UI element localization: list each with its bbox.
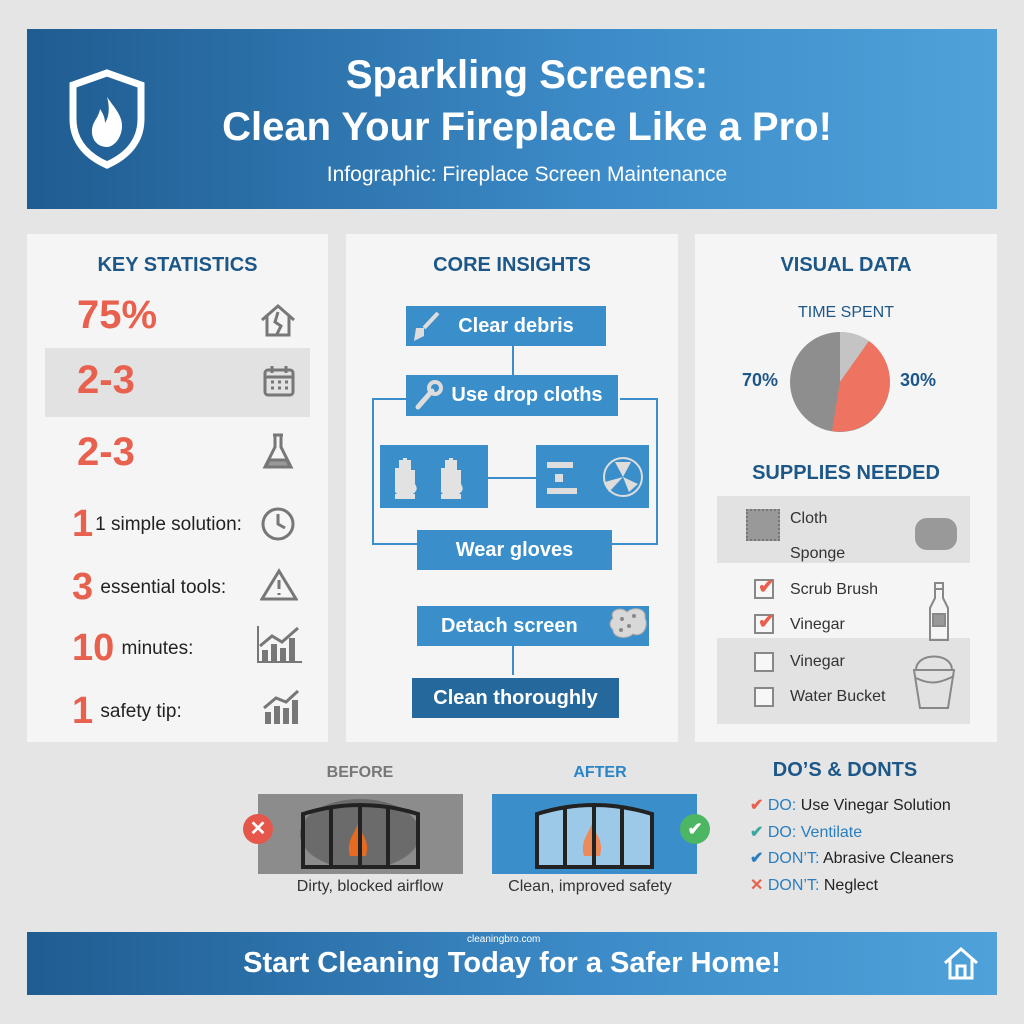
stat values <box>72 293 302 732</box>
box: clean thoroughly <box>412 678 619 718</box>
footer banner: cleaningbro.com <box>467 934 540 945</box>
box: wear gloves: Wear gloves <box>456 538 573 560</box>
before image: ✕ <box>250 818 266 840</box>
before image: BEFORE <box>327 764 393 781</box>
do's and donts: ✕ DON’T: Neglect <box>750 877 878 894</box>
panel: visual data: 70% <box>742 370 778 390</box>
box: clean thoroughly: Clean thoroughly <box>433 686 598 708</box>
after image <box>492 764 710 895</box>
title: Sparkling Screens: <box>346 53 708 97</box>
title <box>222 53 832 149</box>
supplies list: Sponge <box>790 545 845 562</box>
pie chart <box>790 332 890 432</box>
box: lock and fan icons <box>536 445 649 508</box>
box: detach screen <box>417 606 649 646</box>
do's and donts: ✔ DO: Use Vinegar Solution <box>750 797 951 814</box>
footer text: Start Cleaning Today for a Safer Home! <box>243 947 781 979</box>
do's and donts: ✔ DO: Ventilate <box>750 824 862 841</box>
stat values: 3 essential tools: <box>72 566 226 608</box>
supplies list: Scrub Brush <box>790 581 878 598</box>
box: clear debris: Clear debris <box>458 314 574 336</box>
after image: Clean, improved safety <box>508 878 672 895</box>
stat values: 75% <box>77 293 157 337</box>
before image <box>243 764 463 895</box>
icon: home <box>944 947 978 980</box>
panel: key statistics <box>27 234 328 742</box>
after image: AFTER <box>573 764 627 781</box>
supplies list: Vinegar <box>790 616 845 633</box>
icon: shield flame <box>70 69 144 169</box>
stat values: 2-3 <box>77 358 135 402</box>
header banner <box>27 29 997 209</box>
stat values: 2-3 <box>77 430 135 474</box>
supplies list: ✔ <box>758 576 775 598</box>
supplies list: Cloth <box>790 510 827 527</box>
footer banner <box>27 932 997 995</box>
heading: VISUAL DATA <box>780 254 912 276</box>
panel: core insights <box>346 234 678 742</box>
title: Clean Your Fireplace Like a Pro! <box>222 105 832 149</box>
box: detach screen: Detach screen <box>441 614 578 636</box>
box: use drop cloths: Use drop cloths <box>451 384 603 406</box>
highlight row <box>45 348 310 417</box>
before image: Dirty, blocked airflow <box>297 878 443 895</box>
stat values: 1 safety tip: <box>72 690 182 732</box>
stat values: 10 minutes: <box>72 627 193 669</box>
subheading: TIME SPENT <box>798 304 894 321</box>
do's and donts: DO’S & DONTS <box>773 759 917 781</box>
panel: visual data <box>695 234 997 742</box>
panel: visual data: 30% <box>900 370 936 390</box>
box: use drop cloths <box>406 375 618 416</box>
supplies list: ✔ <box>758 611 775 633</box>
do's and donts <box>750 759 954 894</box>
stat values: 11 simple solution: <box>72 503 242 545</box>
supplies list: Water Bucket <box>790 688 885 705</box>
box: clear debris <box>406 306 606 346</box>
subheading: supplies: SUPPLIES NEEDED <box>752 462 940 484</box>
do's and donts: ✔ DON’T: Abrasive Cleaners <box>750 850 954 867</box>
heading: CORE INSIGHTS <box>433 254 591 276</box>
supplies list <box>746 509 957 709</box>
subtitle: Infographic: Fireplace Screen Maintenance <box>327 163 727 186</box>
after image: ✔ <box>687 819 703 839</box>
heading: KEY STATISTICS <box>97 254 258 276</box>
flowchart <box>372 306 658 718</box>
box: gloves icons <box>380 445 488 508</box>
box: wear gloves <box>417 530 612 570</box>
icons <box>261 304 295 336</box>
supplies list: Vinegar <box>790 653 845 670</box>
